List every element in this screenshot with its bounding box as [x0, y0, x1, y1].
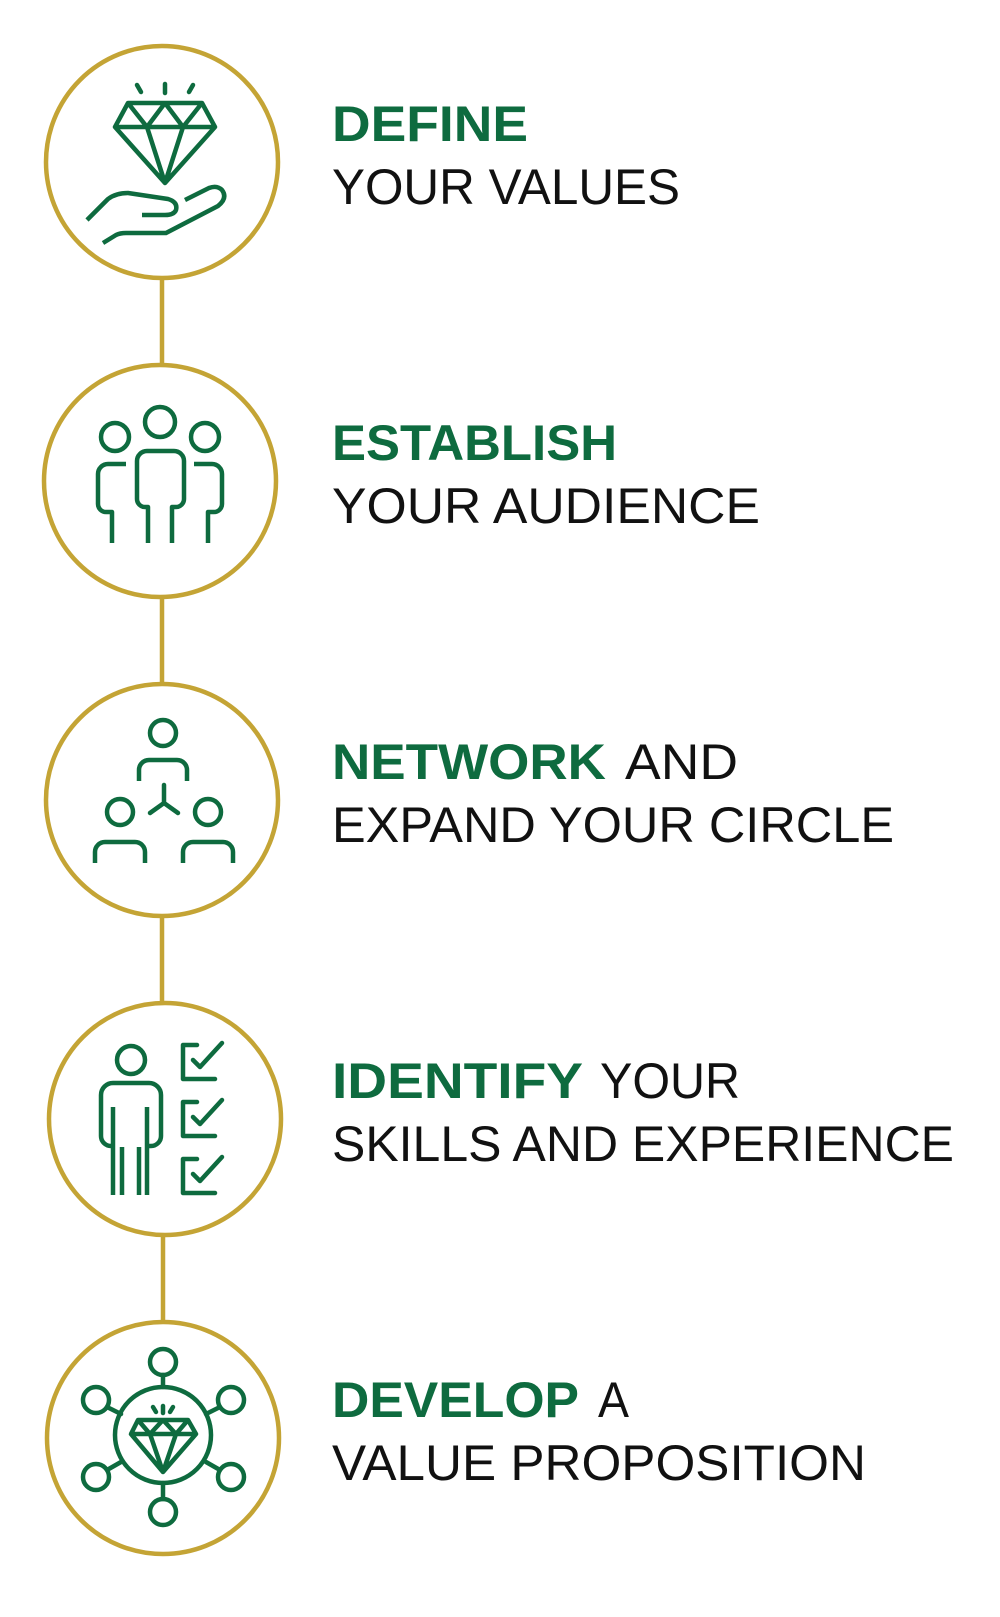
- step 5: develop value proposition: [47, 1322, 866, 1554]
- step 3: network: [46, 684, 894, 916]
- icon circle: group of people: [44, 365, 276, 597]
- text: define your values: DEFINE: [332, 96, 528, 152]
- connector lines: [162, 279, 163, 1321]
- icon circle: diamond network: [47, 1322, 279, 1554]
- step 4: identify skills: [49, 1003, 954, 1235]
- step 2: establish audience: [44, 365, 760, 597]
- step 1: define values: [46, 46, 680, 278]
- icon circle: network hierarchy: [46, 684, 278, 916]
- text: develop a value proposition: DEVELOP: [332, 1372, 579, 1428]
- text: identify your skills and experience: [332, 1053, 954, 1172]
- text: develop a value proposition: [332, 1372, 866, 1491]
- icon circle: diamond in hand: [46, 46, 278, 278]
- icon circle: person with checklist: [49, 1003, 281, 1235]
- text: define your values: YOUR VALUES: [332, 159, 680, 215]
- text: establish your audience: [332, 415, 760, 534]
- text: network and expand your circle: EXPAND YOUR CIRCLE: [332, 797, 894, 853]
- text: identify your skills and experience: YOUR: [600, 1053, 740, 1109]
- text: develop a value proposition: A: [598, 1372, 630, 1428]
- text: establish your audience: ESTABLISH: [332, 415, 617, 471]
- text: develop a value proposition: VALUE PROPOSITION: [332, 1435, 866, 1491]
- text: network and expand your circle: AND: [625, 734, 738, 790]
- text: identify your skills and experience: SKILLS AND EXPERIENCE: [332, 1116, 954, 1172]
- text: define your values: [332, 96, 680, 215]
- text: establish your audience: YOUR AUDIENCE: [332, 478, 760, 534]
- text: network and expand your circle: [332, 734, 894, 853]
- text: identify your skills and experience: IDENTIFY: [332, 1053, 583, 1109]
- text: network and expand your circle: NETWORK: [332, 734, 606, 790]
